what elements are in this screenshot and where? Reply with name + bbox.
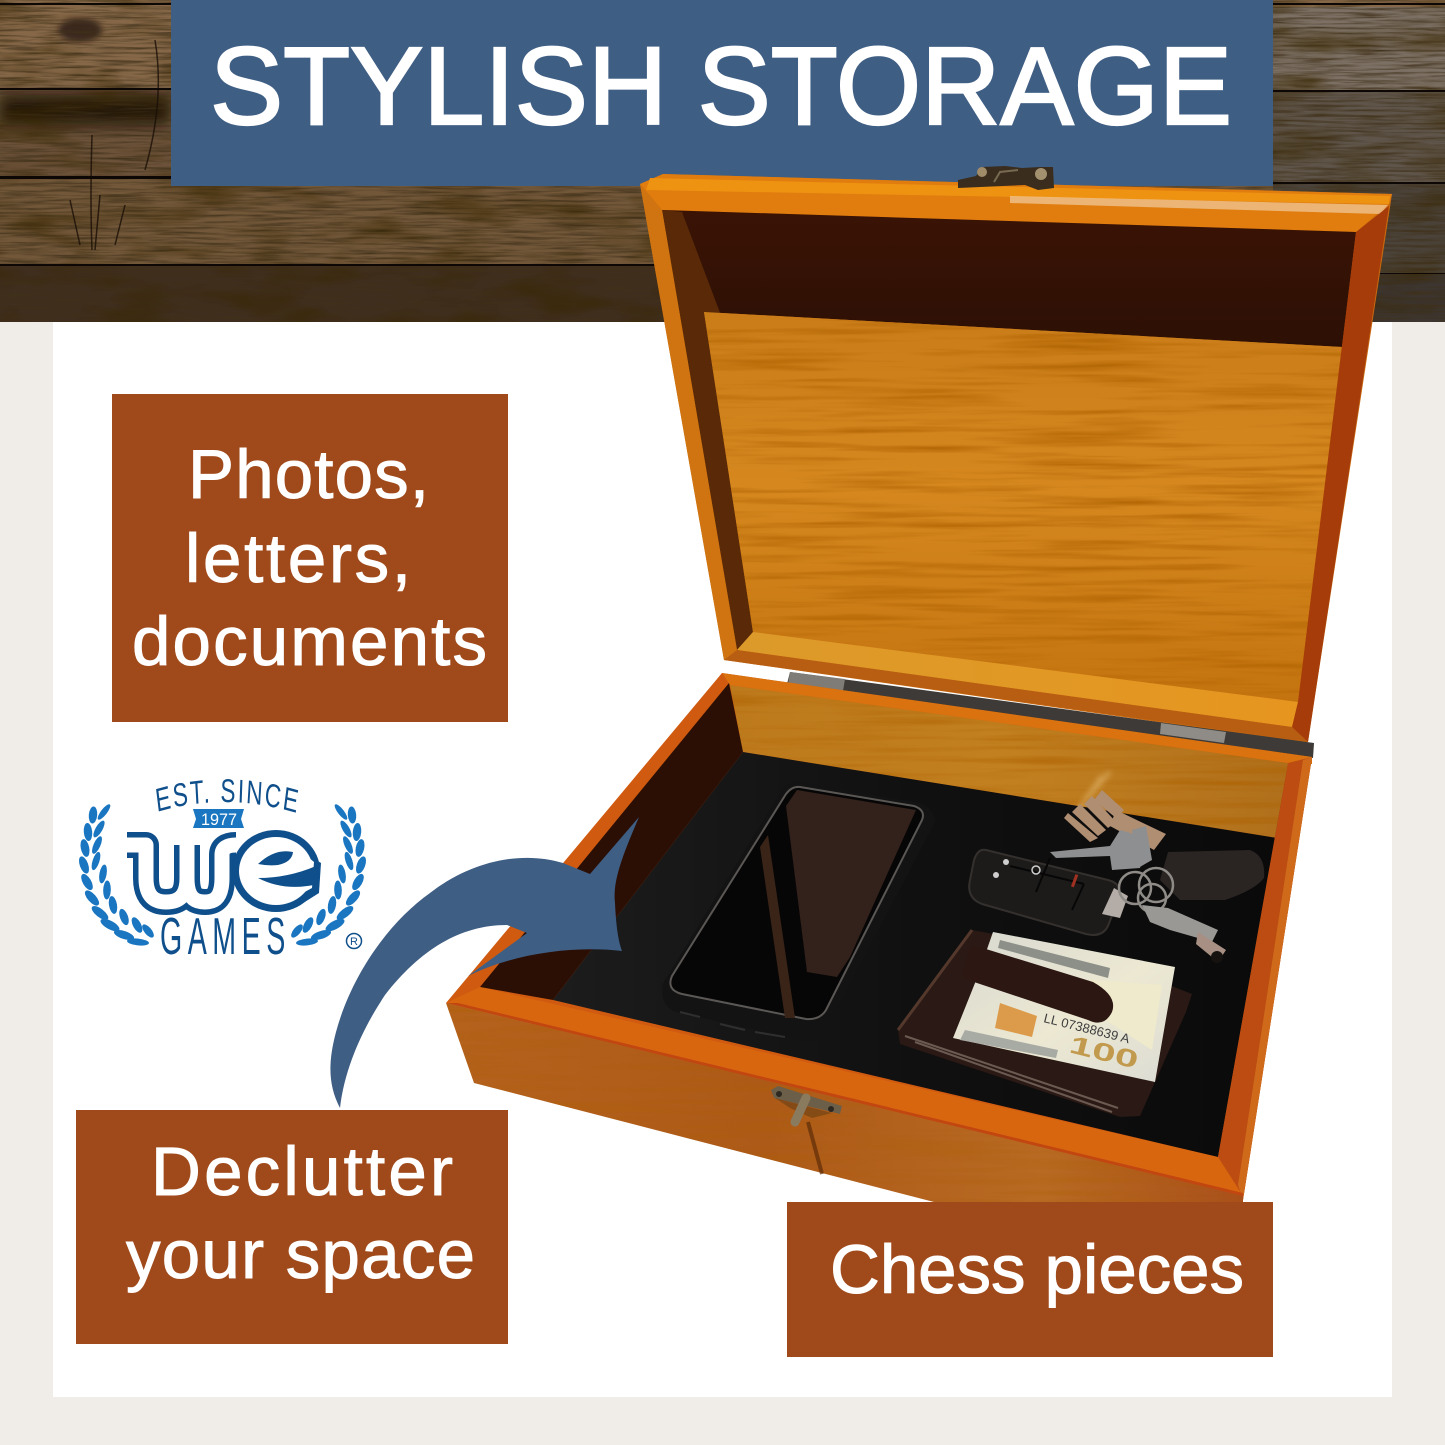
label: photos, letters, documents xyxy=(112,394,508,722)
top latch xyxy=(958,166,1054,190)
back inner wall xyxy=(730,685,1288,838)
serial number: LL 07388639 A xyxy=(1042,1010,1132,1046)
phone case xyxy=(662,782,935,1041)
label: declutter your space xyxy=(76,1110,508,1344)
silver keys xyxy=(1050,826,1152,870)
white content panel xyxy=(53,322,1392,1397)
key rings xyxy=(1119,868,1173,912)
label text line 2: letters, xyxy=(185,520,411,597)
curved arrow xyxy=(330,817,639,1108)
registered mark: R xyxy=(350,936,358,948)
label text line 3: documents xyxy=(132,603,487,680)
logo: WE Games xyxy=(79,779,366,965)
leather clip xyxy=(962,945,1113,1023)
front lip xyxy=(446,987,1243,1196)
label text line 1: Photos, xyxy=(188,436,429,513)
phone screen reflection xyxy=(786,790,916,977)
wood plank header strip xyxy=(0,0,1445,322)
label text line 2: your space xyxy=(126,1216,475,1293)
right plank tones xyxy=(1273,7,1445,90)
open wooden box xyxy=(440,166,1392,1205)
base outer frame xyxy=(446,673,1312,1200)
right hinge xyxy=(1160,723,1226,743)
right frame rail xyxy=(1218,757,1312,1200)
front face xyxy=(446,1003,1243,1202)
orange seal on banknote xyxy=(995,1003,1037,1037)
second key fob xyxy=(1160,850,1264,900)
label text: Chess pieces xyxy=(830,1231,1244,1308)
title banner xyxy=(171,0,1273,186)
left inner wall xyxy=(480,683,743,1000)
box base xyxy=(440,673,1312,1205)
gold 100: 100 xyxy=(1067,1031,1141,1075)
box lid xyxy=(640,174,1392,742)
we wordmark xyxy=(127,830,321,912)
keys and fobs xyxy=(969,790,1264,963)
label: chess pieces xyxy=(787,1202,1273,1357)
games text: GAMES xyxy=(160,907,291,965)
brass keys xyxy=(1064,790,1166,850)
smartphone xyxy=(662,782,935,1041)
front latch xyxy=(771,1086,842,1122)
phone screen xyxy=(670,787,923,1019)
front seam xyxy=(808,1122,822,1174)
1977 ribbon: 1977 xyxy=(201,810,237,829)
left hinge xyxy=(788,672,845,691)
black key fob xyxy=(969,850,1128,935)
laurel right xyxy=(289,803,368,947)
phone bottom slots xyxy=(680,1012,785,1037)
est. since arc text: EST. SINCE xyxy=(156,779,298,813)
cylinder key xyxy=(1142,905,1226,963)
wallet and money clip xyxy=(898,930,1192,1117)
phone reflection stripe xyxy=(760,835,795,1018)
banknote xyxy=(953,932,1175,1082)
black felt floor xyxy=(553,752,1288,1157)
label text line 1: Declutter xyxy=(151,1133,453,1210)
laurel left xyxy=(77,803,156,947)
est. since arc text xyxy=(156,779,298,813)
lid lower lip xyxy=(737,632,1298,727)
registered mark xyxy=(346,934,362,948)
hinge bar xyxy=(787,672,1314,758)
title text: STYLISH STORAGE xyxy=(210,25,1232,148)
